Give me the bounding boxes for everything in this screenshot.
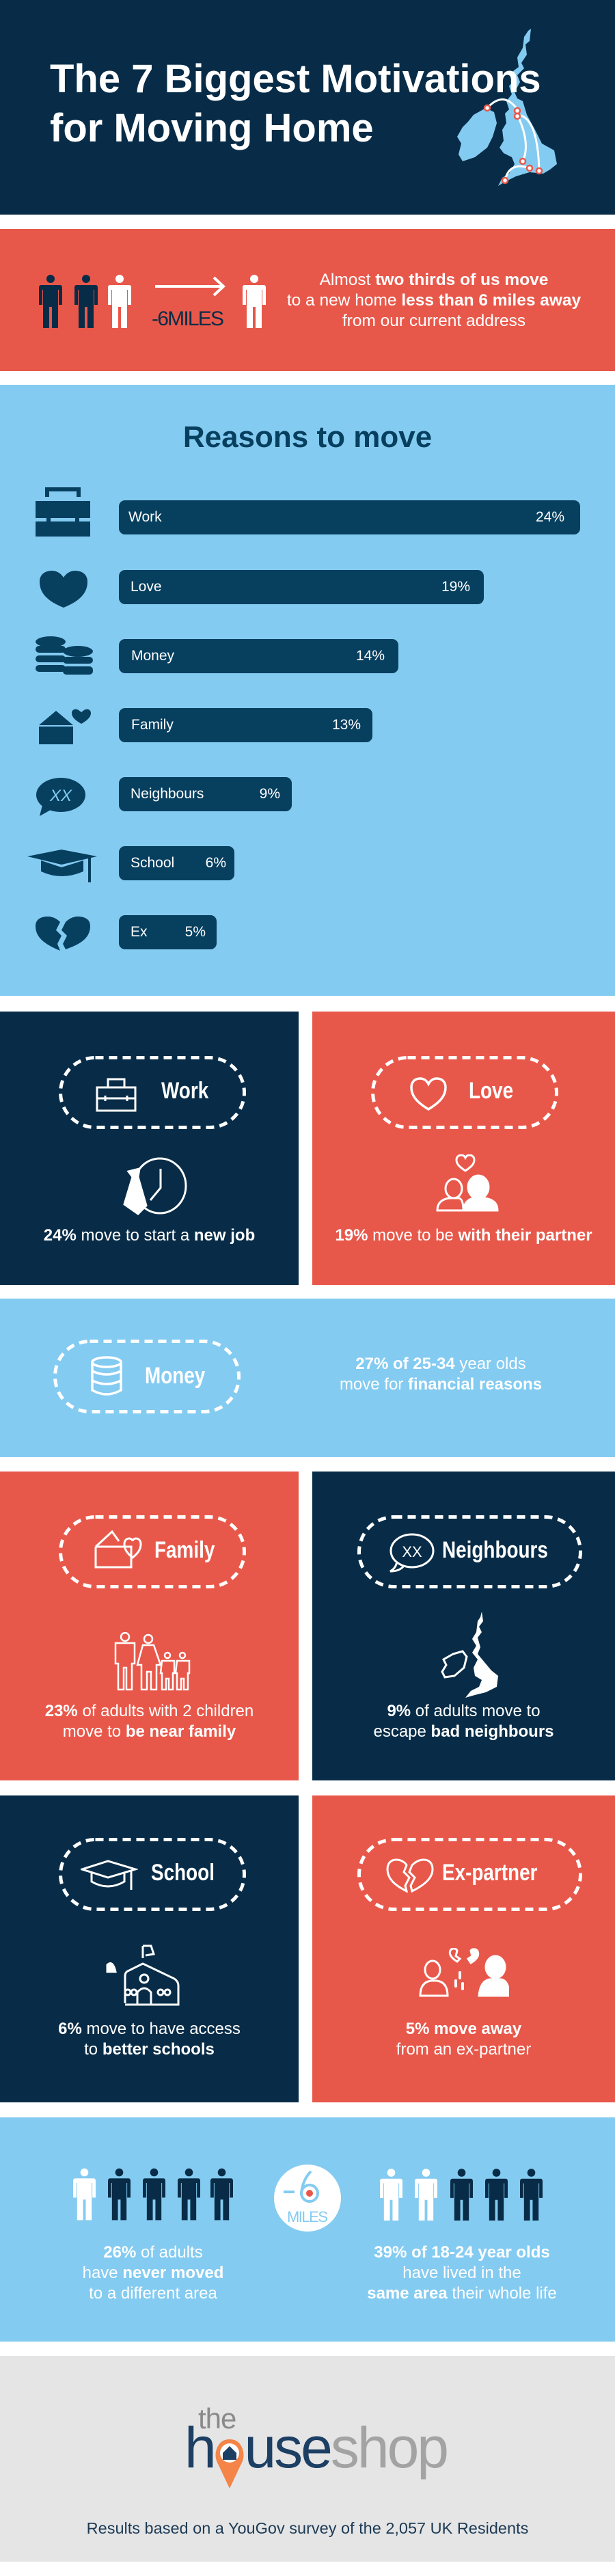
- text: two thirds: Almost two thirds of us move: [320, 271, 548, 289]
- bar: work: 24%: [536, 509, 564, 525]
- pill: work: [59, 1056, 246, 1129]
- icon: 6 miles circle: [274, 2165, 341, 2232]
- pill: love: Love: [469, 1078, 513, 1104]
- bar: love: 19%: [441, 579, 470, 595]
- bar: school: School: [131, 855, 174, 871]
- bar: love: Love: [131, 579, 162, 595]
- bar: family: Family: [131, 717, 174, 733]
- icon: UK map: [441, 1612, 498, 1698]
- text: love stat: 19% move to be with their partner: [335, 1226, 592, 1245]
- text: same area: 39% of 18-24 year olds: [374, 2243, 550, 2262]
- panel: school: [0, 1795, 299, 2102]
- icon: 6 miles circle: MILES: [287, 2208, 328, 2225]
- text: money stat: 27% of 25-34 year olds: [355, 1355, 526, 1373]
- pill: school: School: [151, 1860, 215, 1886]
- text: neighbours stat: [373, 1702, 554, 1741]
- text: money stat: move for financial reasons: [340, 1375, 542, 1394]
- icon: broken heart: [36, 917, 90, 951]
- panel: love: [312, 1012, 615, 1285]
- icon: briefcase: [36, 487, 90, 537]
- pill: ex-partner: [357, 1838, 582, 1911]
- text: money stat: [340, 1355, 542, 1394]
- icon: people moving: [39, 275, 266, 328]
- pill: family: Family: [154, 1537, 215, 1563]
- icon: separated couple: [420, 1948, 509, 1997]
- title: The 7 Biggest Motivations: [50, 57, 541, 101]
- title: [50, 57, 541, 150]
- footer text: Results based on a YouGov survey of the 2,057 UK Residents: [87, 2519, 528, 2537]
- bar: love: [119, 570, 484, 604]
- bar: school: [119, 846, 234, 880]
- text: same area: same area their whole life: [367, 2284, 557, 2303]
- pill: love: [371, 1056, 558, 1129]
- bar: money: Money: [131, 648, 174, 664]
- bar: ex: [119, 915, 217, 949]
- icon: couple with heart: [436, 1154, 499, 1211]
- icon: heart: [40, 571, 87, 608]
- text: never moved: [83, 2243, 223, 2303]
- bar: work: [119, 500, 580, 534]
- text: family stat: move to be near family: [63, 1722, 236, 1741]
- icon: speech xx: [36, 778, 85, 816]
- text: same area: [367, 2243, 557, 2303]
- bar: family: 13%: [332, 717, 361, 733]
- icon: people 26%: [73, 2168, 233, 2220]
- text: school stat: [58, 2020, 241, 2059]
- pill: neighbours: [357, 1515, 582, 1588]
- text: family stat: 23% of adults with 2 children: [45, 1702, 254, 1720]
- text: school stat: to better schools: [84, 2040, 215, 2059]
- text: same area: have lived in the: [402, 2264, 521, 2282]
- bar: ex: 5%: [185, 924, 206, 940]
- pill: money: Money: [145, 1363, 205, 1389]
- panel: ex-partner: [312, 1795, 615, 2102]
- bar: ex: Ex: [131, 924, 148, 940]
- icon: graduation cap: [27, 850, 97, 882]
- icon: school building: [107, 1945, 179, 2005]
- header panel: [0, 0, 615, 215]
- text: never moved: to a different area: [89, 2284, 217, 2303]
- pill: family: [59, 1515, 246, 1588]
- text: two thirds: [287, 271, 581, 330]
- logo: the houseshop: the: [198, 2402, 236, 2435]
- icon: family figures: [115, 1632, 190, 1691]
- icon: people 39%: [380, 2169, 543, 2221]
- bar: family: [119, 708, 372, 742]
- icon: UK map: [457, 29, 557, 186]
- icon: tie and clock: [123, 1158, 187, 1215]
- text: never moved: have never moved: [83, 2264, 223, 2282]
- pill: neighbours: Neighbours: [442, 1537, 548, 1563]
- panel: money: [0, 1299, 615, 1457]
- text: work stat: 24% move to start a new job: [44, 1226, 255, 1245]
- pill: work: Work: [161, 1078, 208, 1104]
- bar: money: 14%: [356, 648, 385, 664]
- text: ex-partner stat: 5% move away: [406, 2020, 521, 2038]
- text: neighbours stat: 9% of adults move to: [387, 1702, 541, 1720]
- bar: work: Work: [128, 509, 162, 525]
- icon: coins: [36, 636, 93, 675]
- panel: footer: [0, 2356, 615, 2562]
- pill: money: [53, 1340, 241, 1413]
- title: for Moving Home: [50, 106, 374, 150]
- panel: neighbours: [312, 1472, 615, 1780]
- panel: family: [0, 1472, 299, 1780]
- bar: neighbours: [119, 777, 292, 811]
- panel: staying local: [0, 2117, 615, 2342]
- bar: neighbours: 9%: [260, 786, 280, 802]
- panel: six miles intro: [0, 229, 615, 371]
- panel: work: [0, 1012, 299, 1285]
- text: two thirds: from our current address: [342, 312, 525, 330]
- text: school stat: 6% move to have access: [58, 2020, 241, 2038]
- bar: school: 6%: [206, 855, 226, 871]
- text: ex-partner stat: from an ex-partner: [396, 2040, 531, 2059]
- panel: reasons to move: [0, 385, 615, 996]
- icon: speech xx: XX: [49, 787, 72, 805]
- text: neighbours stat: escape bad neighbours: [373, 1722, 554, 1741]
- pill: neighbours: XX: [402, 1543, 422, 1560]
- text: two thirds: to a new home less than 6 miles away: [287, 291, 581, 310]
- text: family stat: [45, 1702, 254, 1741]
- bar: neighbours: Neighbours: [131, 786, 204, 802]
- text: never moved: 26% of adults: [103, 2243, 203, 2262]
- text: ex-partner stat: [396, 2020, 531, 2059]
- bar: money: [119, 639, 398, 673]
- pill: ex-partner: Ex-partner: [442, 1860, 537, 1886]
- icon: house heart: [39, 709, 91, 744]
- pill: school: [59, 1838, 246, 1911]
- logo: the houseshop: houseshop: [184, 2415, 447, 2480]
- heading: Reasons to move: [183, 420, 432, 454]
